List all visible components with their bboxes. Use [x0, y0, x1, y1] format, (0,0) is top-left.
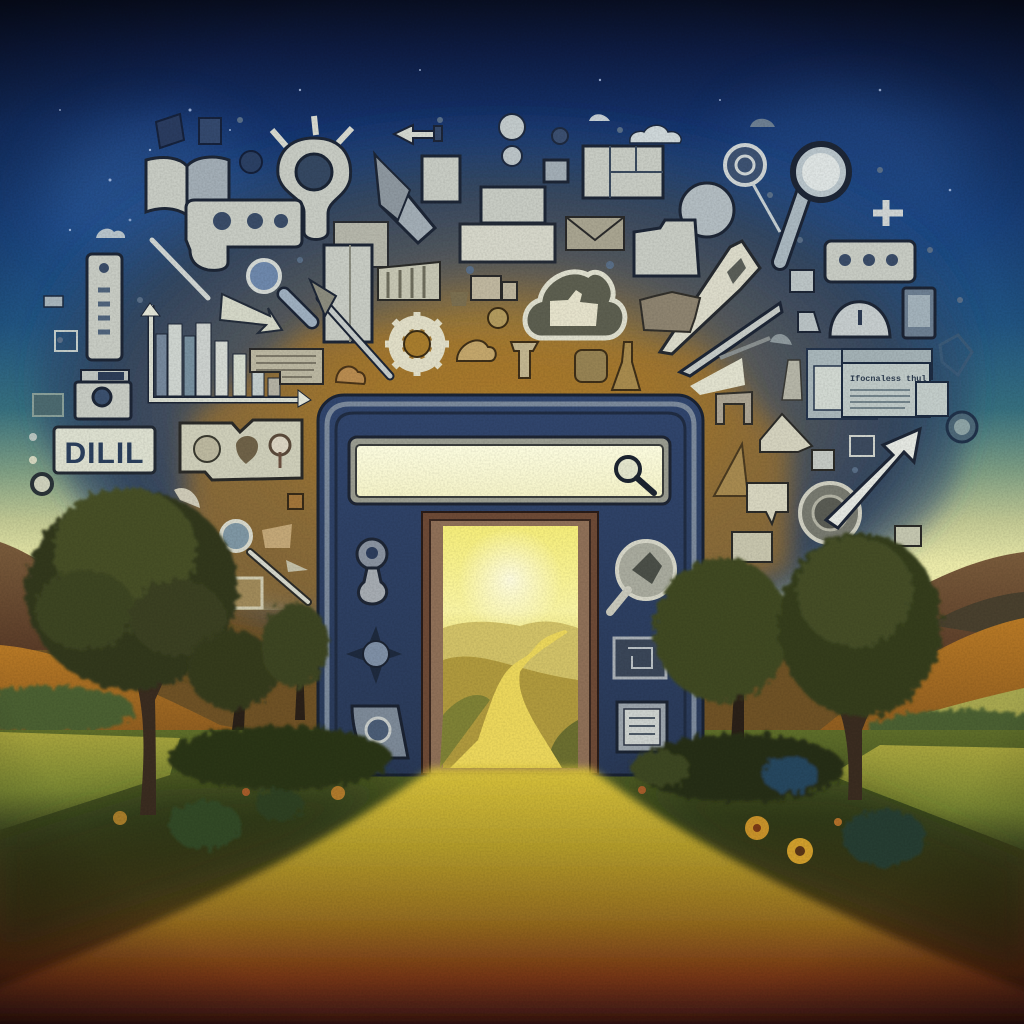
icon: arrow pointing right-down [220, 294, 282, 333]
icon: gear [385, 312, 449, 376]
icon: window layout [583, 146, 663, 198]
icon: shirt shape [640, 292, 700, 332]
icon: web pages [807, 349, 948, 419]
icon: tall document with blade [324, 222, 388, 342]
icon card: pins [180, 420, 302, 480]
icon: chat bubble with three dots left [186, 200, 302, 270]
door opening [422, 512, 598, 774]
label card: DILIL: DILIL [64, 437, 144, 470]
icon: camera [75, 370, 131, 419]
icon cloud backdrop [36, 112, 974, 640]
icon: stacked panels centre [460, 160, 568, 262]
left shrubs [168, 726, 392, 849]
icon: web pages: Ifocnaless thul [850, 374, 927, 384]
icon: magnifier left [248, 260, 312, 322]
icon: lollipop spiral [725, 145, 780, 232]
icon: open book [146, 157, 229, 215]
icon: dome gauge [830, 302, 890, 337]
icon: leaf chevrons far right [940, 335, 972, 375]
search bar [349, 437, 670, 504]
icon: bars card [378, 262, 440, 300]
right meadow [830, 745, 1024, 850]
icon: small frames left [29, 296, 77, 494]
icon: remote panel [87, 254, 122, 360]
sky background [0, 0, 1024, 620]
icon: small shapes right of door [690, 358, 921, 562]
bar chart [141, 303, 311, 407]
icon: sphere and folder [634, 183, 734, 276]
icon: clouds top [589, 114, 775, 143]
right ground shadow [620, 780, 1024, 970]
ground [0, 730, 1024, 1024]
icon: prism shape [375, 155, 460, 243]
icon: envelope [566, 217, 624, 250]
icon: small shapes lower left [174, 488, 308, 608]
icon: search magnifier [616, 457, 654, 493]
icon: keyhole handle [357, 539, 387, 604]
near fields [443, 657, 578, 768]
icon: leaf magnifier [610, 541, 675, 612]
icon: chat bubble right [825, 241, 915, 282]
left flowers [113, 786, 345, 825]
icon: eye badge [352, 706, 408, 758]
sun glow [458, 528, 562, 632]
scattered dots [57, 117, 963, 473]
right shrubs [630, 734, 927, 866]
right trees [654, 533, 942, 800]
icon: magnifier top right [780, 144, 849, 262]
door inner rim [327, 404, 694, 772]
glowing path [0, 768, 1024, 1024]
icon: magnifier lower left [221, 521, 308, 602]
icon: clouds and tiles lower centre [336, 340, 607, 384]
left meadow [0, 732, 180, 830]
icon: sun compass [346, 626, 402, 684]
label card: DILIL [54, 427, 155, 473]
icon: saw [660, 241, 760, 354]
icon: upward arrow to target [800, 429, 920, 543]
icon: circles [499, 114, 568, 166]
icon: small tiles centre [450, 276, 517, 328]
distant hills [0, 542, 1024, 745]
icon: pen stroke [310, 280, 390, 376]
icon: tablet [903, 288, 935, 338]
large left tree [26, 488, 238, 815]
icon: monitor [614, 638, 666, 678]
gold glow behind door [180, 330, 790, 620]
text card with lines [250, 349, 323, 384]
starry nebula [40, 69, 980, 260]
far hills [443, 622, 578, 768]
ground shadow under trees [0, 780, 410, 950]
door frame panel [318, 395, 703, 775]
tree lines [0, 686, 1024, 750]
icon: pencil top left [152, 240, 208, 298]
icon: target ring right [947, 412, 977, 442]
right flowers [638, 786, 842, 864]
icon: small cloud left [96, 229, 125, 238]
small left tree [188, 603, 329, 730]
winding road [450, 630, 568, 768]
icon: plus [873, 200, 903, 226]
icon: document tile [617, 702, 667, 752]
pale far meadow right [815, 688, 1024, 760]
icon: cloud thumbs up [525, 272, 625, 338]
icon: small tiles right [770, 270, 820, 400]
orange fields [0, 618, 1024, 745]
icon: lightbulb ring [272, 116, 352, 240]
icon: flask [612, 342, 640, 390]
icon: small squares top left [156, 114, 262, 173]
icon: pen right [680, 303, 782, 376]
door outer shell [318, 395, 703, 775]
icon: left arrow [394, 125, 442, 144]
